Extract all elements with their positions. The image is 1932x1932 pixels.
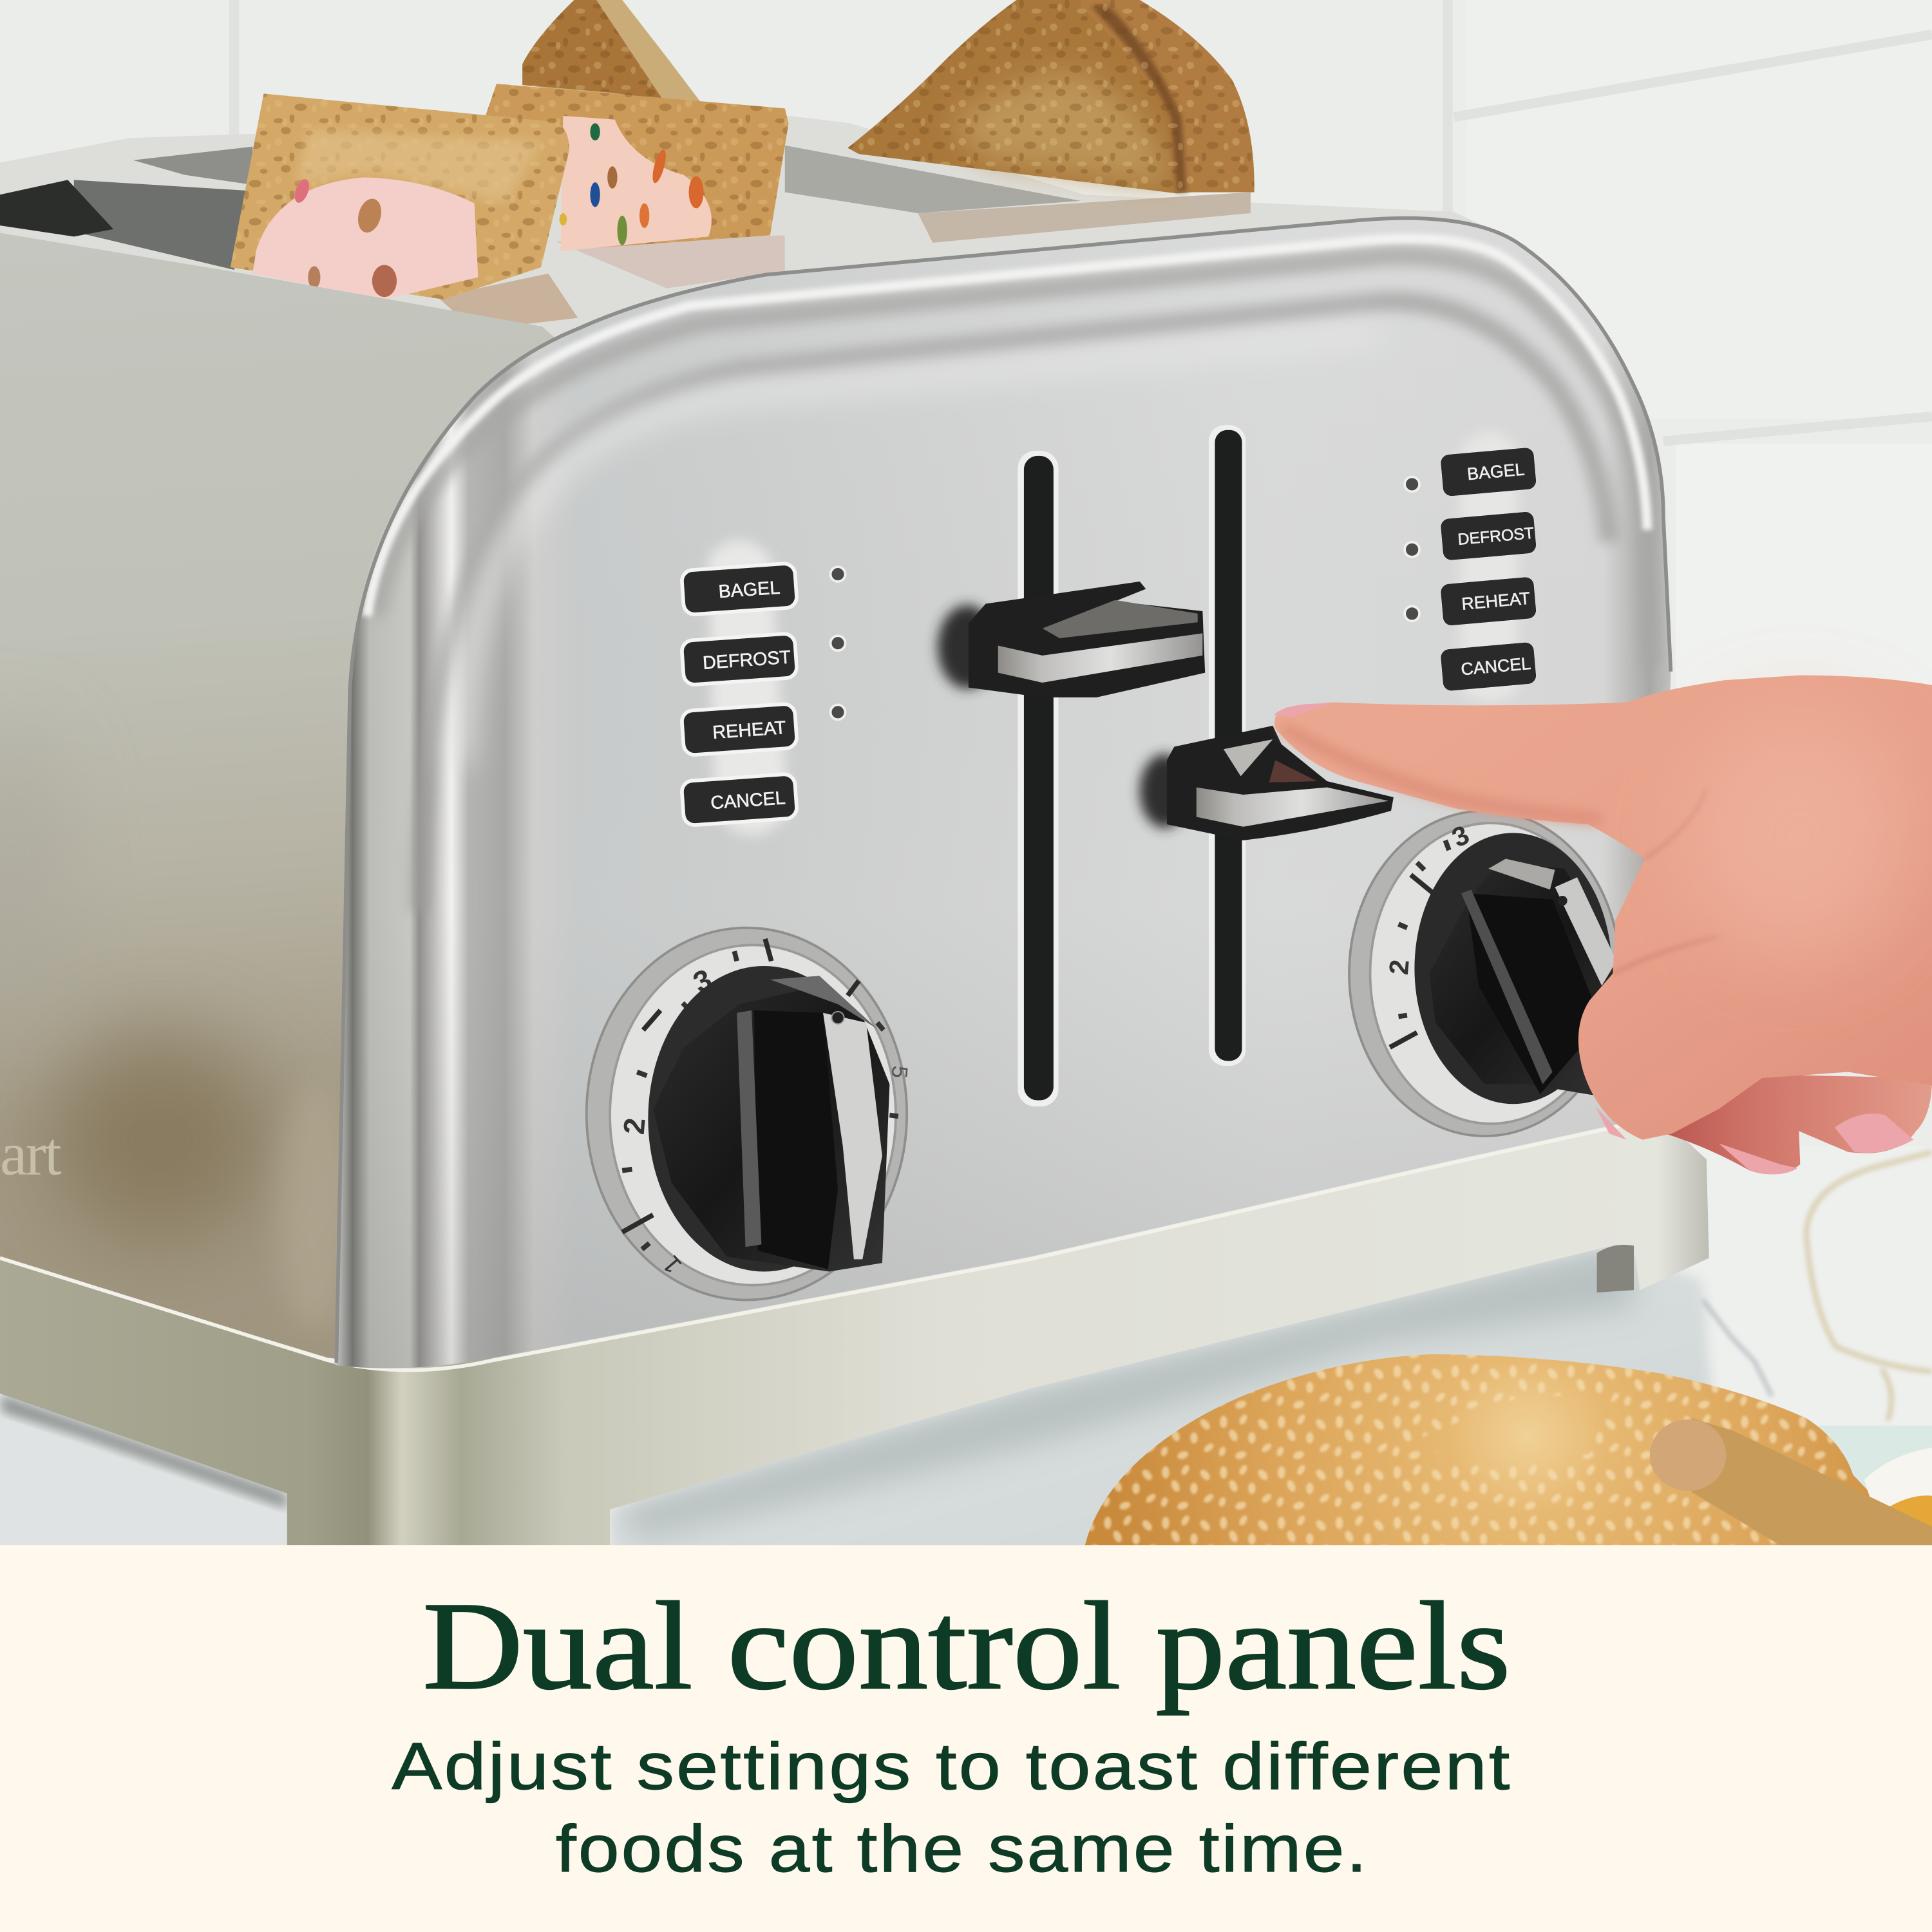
dial label 1: 1 [658, 1251, 687, 1279]
button: bagel: BAGEL [718, 578, 781, 602]
button: defrost [681, 633, 797, 685]
right lever [1140, 726, 1394, 840]
lower fingers [1657, 1074, 1932, 1174]
right lever slot [1209, 425, 1245, 1066]
fingernails [1274, 703, 1913, 1174]
toaster front panel [335, 217, 1671, 1368]
toaster top surface [0, 116, 1528, 345]
left indicator lights [831, 567, 845, 719]
toaster foot [1597, 1245, 1634, 1293]
button: bagel [681, 563, 797, 615]
dial ring [587, 928, 912, 1300]
right dial [1349, 811, 1620, 1136]
button: defrost right [1440, 511, 1537, 561]
toast: right slice [848, 0, 1255, 193]
bagel [1072, 1343, 1922, 1553]
button: reheat right: REHEAT [1461, 589, 1531, 614]
button: cancel: CANCEL [710, 788, 786, 813]
body line 2: foods at the same time. [556, 1811, 1369, 1886]
brand text on side: art [0, 1119, 62, 1188]
food on plate [1864, 1448, 1932, 1545]
dial label 3: 3 [688, 962, 717, 999]
button: cancel right: CANCEL [1460, 654, 1531, 679]
reflection of bread [918, 192, 1251, 243]
right button recess [1460, 431, 1518, 703]
button: reheat right [1440, 576, 1537, 626]
heading: Dual control panels [422, 1577, 1511, 1716]
right dial ring [1349, 811, 1620, 1136]
dial knob [648, 966, 889, 1271]
toaster base [0, 1115, 1709, 1545]
button: reheat: REHEAT [712, 717, 786, 743]
slot interior dark [0, 180, 113, 236]
toast: back pastry [486, 84, 788, 251]
left lever slot [1018, 451, 1058, 1106]
button: bagel right [1440, 447, 1537, 497]
counter [0, 1146, 1932, 1565]
right dial label 2: 2 [1383, 958, 1415, 976]
toaster left side [0, 233, 591, 1363]
button: defrost right: DEFROST [1457, 524, 1535, 549]
right indicator lights [1405, 477, 1419, 621]
toast: front pastry [231, 93, 569, 299]
right dial knob [1414, 833, 1616, 1104]
button: reheat [681, 703, 797, 755]
left lever [938, 582, 1205, 697]
button: defrost: DEFROST [702, 647, 791, 674]
dial label 2: 2 [617, 1117, 652, 1136]
button: bagel right: BAGEL [1466, 460, 1525, 484]
left control buttons [681, 563, 797, 826]
left dial [587, 928, 912, 1300]
hand pointing at lever [1274, 675, 1932, 1174]
toast: back slice [522, 0, 703, 106]
button: cancel right [1440, 641, 1537, 692]
hand palm and index finger [1274, 675, 1932, 1140]
right rear slot [785, 146, 1081, 213]
right dial label 3: 3 [1447, 819, 1473, 853]
front left slot [74, 180, 252, 270]
wall tiles [0, 0, 1932, 1146]
panel: caption [0, 1545, 1932, 1932]
dial label 5: 5 [886, 1065, 912, 1079]
wooden stick [1650, 1418, 1932, 1548]
reflection of back pastry [556, 235, 785, 289]
body line 1: Adjust settings to toast different [392, 1728, 1512, 1803]
button: cancel [681, 773, 797, 826]
rear left slot [133, 147, 252, 185]
left button recess [708, 540, 788, 838]
right control buttons [1440, 447, 1537, 692]
reflection of front pastry [437, 274, 578, 330]
